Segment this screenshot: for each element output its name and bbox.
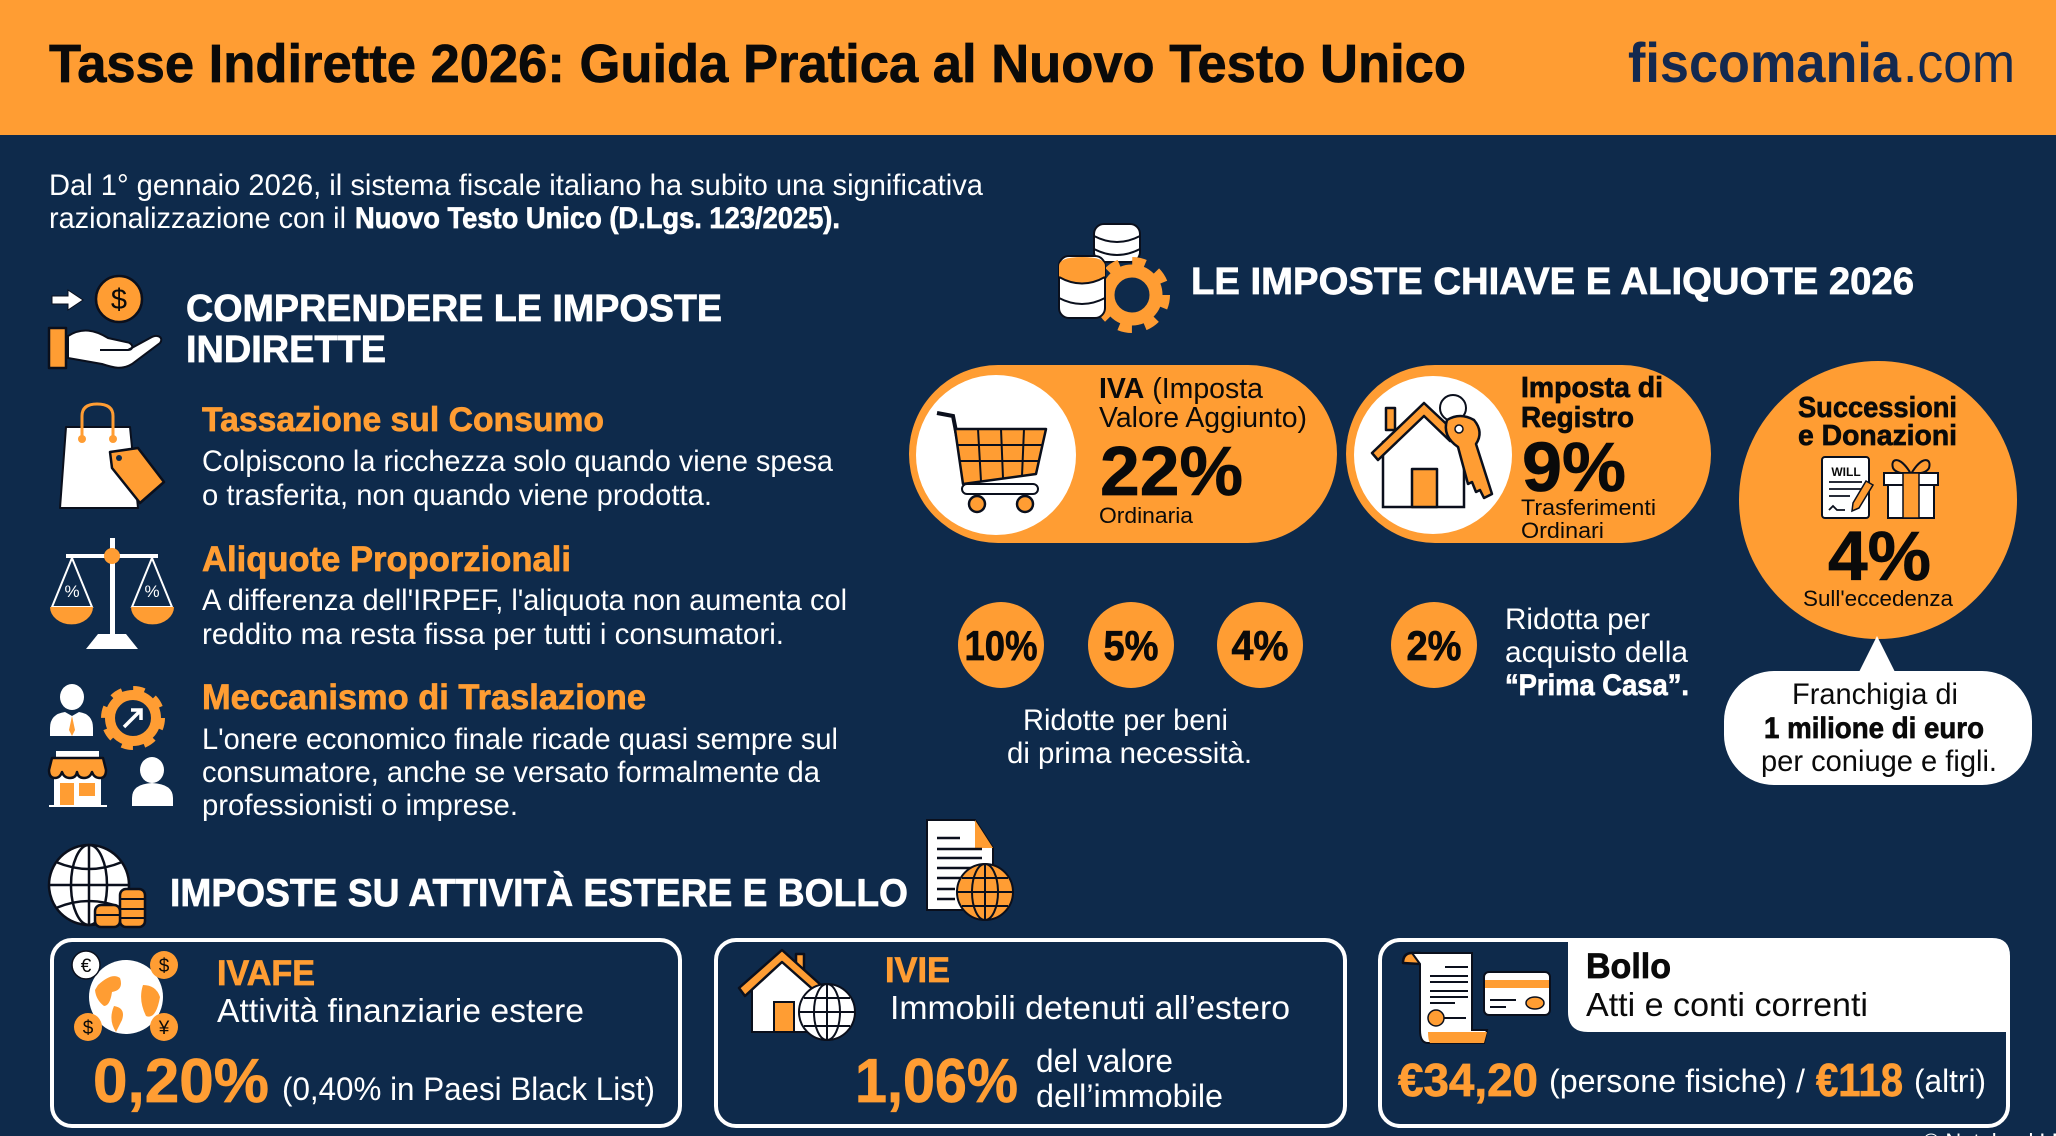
callout: franchigia: 1 milione di euro xyxy=(1764,712,1984,745)
card: Bollo: €118 xyxy=(1816,1054,1903,1106)
panel: comprendere le imposte indirette xyxy=(49,276,847,822)
heading: INDIRETTE xyxy=(186,329,386,371)
icon: globe with currencies xyxy=(72,951,178,1041)
icon: globe with currencies: $ xyxy=(159,956,170,977)
reduced IVA rates: di prima necessità. xyxy=(1007,737,1252,770)
card: IVIE: dell’immobile xyxy=(1036,1078,1223,1114)
intro text xyxy=(49,169,983,235)
icon: balance scale xyxy=(50,538,174,649)
card: Bollo: (altri) xyxy=(1914,1063,1986,1099)
pill: imposta di registro: Registro xyxy=(1521,402,1634,434)
card: Bollo: Atti e conti correnti xyxy=(1586,986,1868,1023)
pill: imposta di registro xyxy=(1346,365,1711,543)
reduced IVA rates: 5% xyxy=(1104,622,1158,669)
callout: franchigia: Franchigia di xyxy=(1792,678,1958,711)
heading: IMPOSTE SU ATTIVITÀ ESTERE E BOLLO xyxy=(170,871,908,915)
reduced IVA rates: Ridotte per beni xyxy=(1023,704,1228,737)
icon: document and globe xyxy=(927,820,1013,920)
item: meccanismo di traslazione: consumatore, anche se versato formalmente da xyxy=(202,756,820,789)
icon: balance scale: % xyxy=(144,582,160,601)
card: IVAFE: 0,20% xyxy=(93,1047,269,1116)
intro text: Dal 1° gennaio 2026, il sistema fiscale italiano ha subito una significativa xyxy=(49,169,983,202)
icon: globe with currencies: $ xyxy=(83,1018,94,1039)
card: Bollo: Bollo xyxy=(1586,947,1671,986)
card: Bollo xyxy=(1380,938,2010,1126)
item: meccanismo di traslazione: professionisti o imprese. xyxy=(202,789,518,822)
card: IVAFE: Attività finanziarie estere xyxy=(217,992,584,1029)
icon: globe and coins xyxy=(49,845,145,927)
reduced registro rate xyxy=(1391,602,1689,702)
item: meccanismo di traslazione xyxy=(49,678,838,822)
item: aliquote proporzionali: A differenza dell'IRPEF, l'aliquota non aumenta col xyxy=(202,584,847,617)
icon: gift xyxy=(1884,460,1938,518)
card: IVIE: del valore xyxy=(1036,1043,1173,1079)
icon: will document: WILL xyxy=(1831,465,1861,479)
heading: LE IMPOSTE CHIAVE E ALIQUOTE 2026 xyxy=(1191,261,1914,303)
pill: IVA: IVA (Imposta xyxy=(1099,373,1264,405)
icon: scroll and card xyxy=(1403,953,1550,1043)
reduced IVA rates: 4% xyxy=(1232,622,1288,669)
icon: globe with currencies: ¥ xyxy=(158,1018,170,1039)
callout: franchigia xyxy=(1724,636,2032,785)
pill: imposta di registro: 9% xyxy=(1522,428,1626,506)
icon: coins and gear xyxy=(1059,224,1166,329)
reduced registro rate: “Prima Casa”. xyxy=(1505,669,1689,702)
panel: le imposte chiave e aliquote 2026 xyxy=(909,224,2032,785)
icon: people, gear and shop xyxy=(49,684,173,807)
item: tassazione sul consumo: o trasferita, non quando viene prodotta. xyxy=(202,479,712,512)
icon: will document xyxy=(1822,457,1873,518)
item: aliquote proporzionali xyxy=(50,538,847,651)
icon: shopping cart xyxy=(937,413,1046,512)
pill: imposta di registro: Imposta di xyxy=(1521,372,1663,404)
header band xyxy=(0,0,2056,135)
heading xyxy=(186,288,722,371)
reduced IVA rates: 10% xyxy=(964,622,1038,669)
circle: successioni e donazioni: e Donazioni xyxy=(1798,420,1957,452)
icon: shopping bag with tag xyxy=(60,404,164,508)
card: IVIE xyxy=(716,940,1345,1126)
card: Bollo: (persone fisiche) / xyxy=(1549,1063,1805,1099)
card: IVIE: Immobili detenuti all’estero xyxy=(890,989,1290,1026)
item: meccanismo di traslazione: L'onere economico finale ricade quasi sempre sul xyxy=(202,723,838,756)
circle: successioni e donazioni: Successioni xyxy=(1798,392,1957,424)
intro text: Nuovo Testo Unico (D.Lgs. 123/2025). xyxy=(355,202,840,235)
callout: franchigia: per coniuge e figli. xyxy=(1761,745,1997,778)
icon: balance scale: % xyxy=(64,582,80,601)
item: aliquote proporzionali: Aliquote Proporzionali xyxy=(202,540,571,579)
card: Bollo: €34,20 xyxy=(1398,1054,1538,1106)
item: tassazione sul consumo xyxy=(60,401,833,512)
reduced registro rate: acquisto della xyxy=(1505,636,1688,669)
item: tassazione sul consumo: Colpiscono la ricchezza solo quando viene spesa xyxy=(202,445,833,478)
icon: house and key xyxy=(1372,395,1492,507)
pill: imposta di registro: Ordinari xyxy=(1521,518,1604,543)
reduced registro rate: 2% xyxy=(1406,622,1462,669)
icon: house and globe xyxy=(739,950,855,1040)
pill: IVA: 22% xyxy=(1100,432,1243,510)
pill: IVA xyxy=(909,365,1337,543)
reduced IVA rates xyxy=(958,602,1303,770)
panel: imposte su attività estere e bollo xyxy=(49,820,2010,1126)
circle: successioni e donazioni: 4% xyxy=(1828,517,1931,595)
circle: successioni e donazioni: Sull'eccedenza xyxy=(1803,586,1954,611)
intro text: razionalizzazione con il xyxy=(49,202,346,235)
heading: COMPRENDERE LE IMPOSTE xyxy=(186,288,722,330)
icon: hand receiving money xyxy=(49,276,161,368)
pill: imposta di registro: Trasferimenti xyxy=(1521,495,1656,520)
pill: IVA: Valore Aggiunto) xyxy=(1099,402,1307,434)
card: IVIE: 1,06% xyxy=(855,1047,1018,1116)
title: Tasse Indirette 2026: Guida Pratica al Nuovo Testo Unico xyxy=(49,34,1466,94)
pill: IVA: Ordinaria xyxy=(1099,503,1194,528)
logo: fiscomania.com: fiscomania xyxy=(1628,31,1902,94)
circle: successioni e donazioni xyxy=(1739,361,2017,639)
card: IVAFE xyxy=(52,940,680,1126)
item: aliquote proporzionali: reddito ma resta fissa per tutti i consumatori. xyxy=(202,618,784,651)
reduced registro rate: Ridotta per xyxy=(1505,603,1650,636)
card: IVAFE: (0,40% in Paesi Black List) xyxy=(282,1071,655,1107)
icon: globe with currencies: € xyxy=(81,956,92,977)
card: IVAFE: IVAFE xyxy=(217,954,315,993)
logo: fiscomania.com: .com xyxy=(1903,31,2015,94)
card: IVIE: IVIE xyxy=(885,951,950,990)
icon: hand receiving money: $ xyxy=(111,284,127,316)
item: tassazione sul consumo: Tassazione sul Consumo xyxy=(202,401,604,439)
item: meccanismo di traslazione: Meccanismo di Traslazione xyxy=(202,678,646,717)
